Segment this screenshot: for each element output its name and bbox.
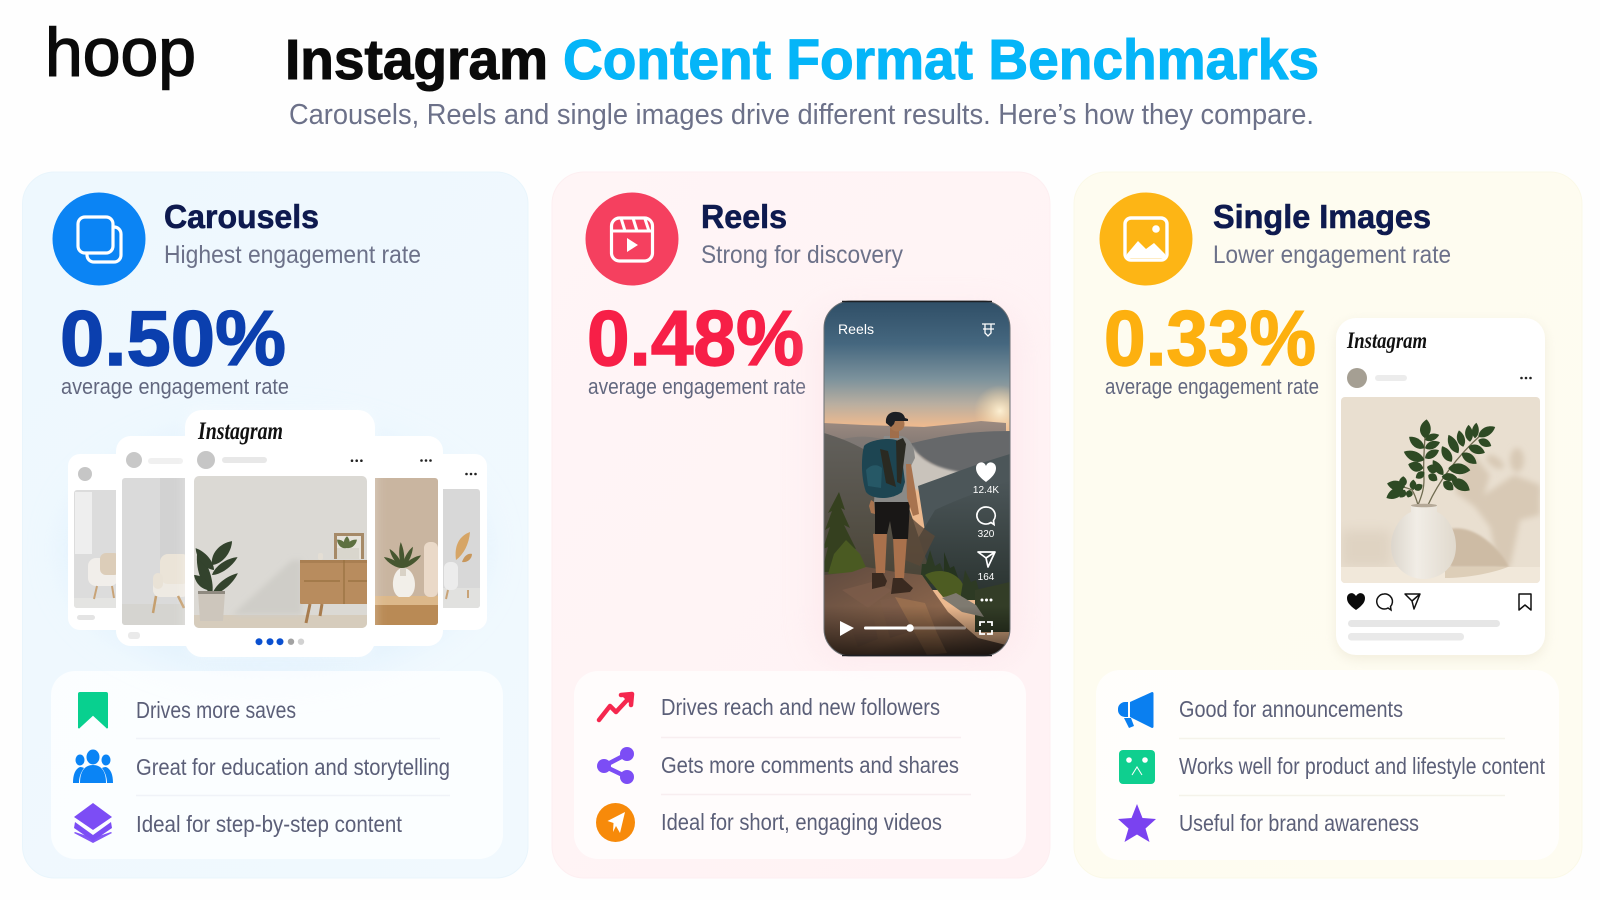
post actions [1347, 593, 1531, 610]
icon: picture [1119, 750, 1155, 784]
icon: play [840, 621, 854, 636]
phone mockup [815, 301, 1026, 666]
icon: more [980, 598, 992, 602]
rock [824, 567, 1004, 655]
icon: comment [977, 507, 995, 524]
stat label: average engagement rate [588, 374, 806, 399]
progress bar [864, 624, 966, 632]
left slope [824, 433, 926, 575]
instagram wordmark: Instagram [1346, 328, 1427, 353]
icon: layers [74, 803, 112, 843]
card: far left [68, 454, 116, 630]
benefit text: Ideal for short, engaging videos [661, 809, 942, 835]
icon: image [1100, 192, 1192, 286]
instagram post mockup [1336, 318, 1545, 659]
icon: star [1118, 804, 1156, 842]
stat: 0.33%: 0.33% [1104, 294, 1316, 382]
heading: carousels: Carousels [164, 198, 319, 235]
panel: reels [552, 172, 1050, 878]
benefit text: Useful for brand awareness [1179, 810, 1419, 836]
stat label: average engagement rate [1105, 374, 1319, 399]
heading: single images: Single Images [1213, 198, 1431, 235]
icon: trending arrow [599, 694, 632, 720]
card: right [374, 436, 443, 646]
carousel dots [256, 638, 304, 645]
heading: reels: Reels [701, 198, 787, 235]
icon: share [597, 747, 634, 784]
far mountains [824, 421, 1006, 469]
avatar row [1347, 368, 1532, 388]
instagram wordmark: Instagram [197, 418, 283, 445]
stat: 0.50%: 0.50% [60, 294, 286, 382]
subheading: reels: Strong for discovery [701, 241, 903, 269]
title: Content Format Benchmarks [563, 28, 1319, 92]
icon: people [73, 750, 113, 783]
stat: 0.48%: 0.48% [587, 294, 804, 382]
benefits card: single images [1096, 670, 1559, 860]
stat label: average engagement rate [61, 374, 289, 399]
right slopes [918, 454, 1010, 528]
card: center [185, 410, 375, 657]
benefits card: reels [574, 671, 1026, 859]
count: likes: 12.4K [973, 485, 999, 496]
benefit text: Good for announcements [1179, 696, 1403, 722]
benefits card: carousels [51, 671, 503, 859]
hiker [862, 412, 919, 594]
count: comments: 320 [978, 529, 995, 540]
lake [911, 446, 959, 491]
benefit text: Great for education and storytelling [136, 754, 450, 780]
reels label: Reels [838, 321, 874, 337]
subtitle: Carousels, Reels and single images drive different results. Here’s how they compare. [289, 99, 1314, 131]
image: plant in vase [1341, 397, 1541, 583]
panel: carousels [22, 172, 528, 878]
benefit text: Drives more saves [136, 697, 296, 723]
trees [822, 492, 857, 572]
card: far right [443, 454, 487, 630]
image: living room [191, 476, 370, 628]
icon: send [978, 552, 995, 567]
subheading: carousels: Highest engagement rate [164, 241, 421, 269]
caption placeholders [1348, 620, 1500, 640]
icon: carousel layers [52, 192, 146, 286]
icon: heart [976, 462, 996, 482]
benefit text: Drives reach and new followers [661, 694, 940, 720]
carousel mockup [65, 410, 487, 675]
logo: hoop: hoop [45, 14, 196, 90]
title: Instagram [285, 28, 548, 92]
icon: fullscreen [980, 622, 992, 634]
subheading: single images: Lower engagement rate [1213, 241, 1451, 269]
icon: megaphone [1118, 692, 1154, 728]
icon: rocket badge [596, 803, 635, 842]
benefit text: Gets more comments and shares [661, 752, 959, 778]
benefit text: Ideal for step-by-step content [136, 811, 403, 837]
count: shares: 164 [978, 572, 995, 583]
icon: bookmark [78, 692, 108, 728]
card: left [116, 436, 186, 646]
icon: camera [982, 324, 995, 336]
panel: single images [1074, 172, 1582, 878]
icon: reels [586, 192, 678, 286]
